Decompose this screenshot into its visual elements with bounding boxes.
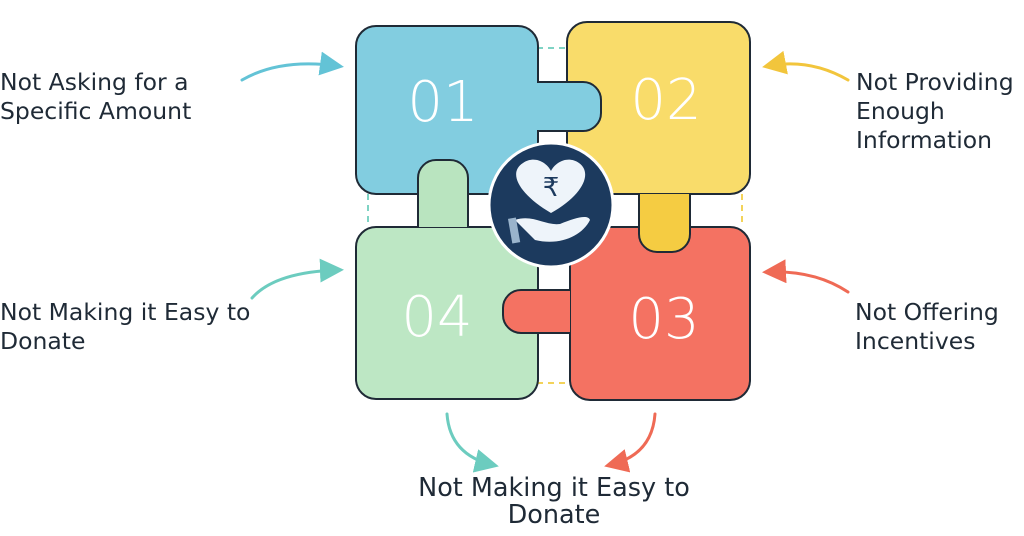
text: bottom: Donate (508, 500, 600, 530)
text: bottom (418, 473, 690, 530)
text: item 02: Information (856, 126, 992, 154)
text: item 01 (0, 68, 191, 125)
arrows (242, 64, 848, 465)
text: item 02 (856, 68, 1014, 154)
text: bottom: Not Making it Easy to (418, 473, 690, 503)
numbers: 01 (407, 70, 479, 135)
center icon: ₹ (543, 173, 559, 203)
text: item 04: Donate (0, 327, 85, 355)
text: item 01: Not Asking for a (0, 68, 189, 96)
tabs (418, 82, 690, 333)
piece bodies (356, 22, 750, 400)
text: item 02: Enough (856, 97, 945, 125)
numbers: 03 (628, 287, 700, 352)
text: item 04 (0, 298, 250, 355)
text: item 02: Not Providing (856, 68, 1014, 96)
text: item 01: Specific Amount (0, 97, 191, 125)
text: item 03 (855, 298, 999, 355)
numbers: 04 (401, 285, 473, 350)
text: item 03: Not Offering (855, 298, 999, 326)
dashed connectors (368, 48, 742, 383)
numbers: 02 (630, 68, 702, 133)
center icon (489, 143, 613, 267)
numbers (401, 68, 702, 352)
text: item 03: Incentives (855, 327, 975, 355)
text: item 04: Not Making it Easy to (0, 298, 250, 326)
